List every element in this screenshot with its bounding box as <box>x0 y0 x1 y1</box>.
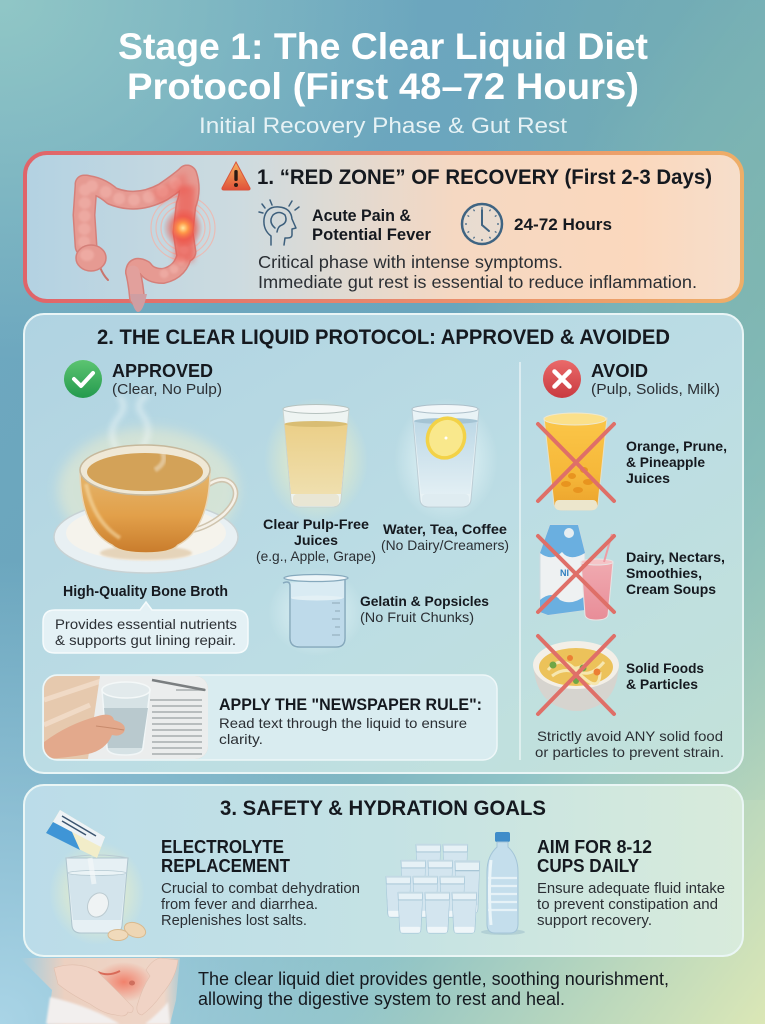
approved heading <box>112 361 222 398</box>
warning icon <box>222 162 250 190</box>
icon: avoid cross <box>543 360 581 398</box>
avoid heading: AVOID <box>591 361 648 381</box>
avoid note: Strictly avoid ANY solid food <box>537 728 723 744</box>
hydration text: to prevent constipation and <box>537 896 718 913</box>
symptom label <box>312 207 432 244</box>
closing message: allowing the digestive system to rest and heal. <box>198 989 565 1009</box>
red zone description <box>258 252 697 292</box>
panel: safety and hydration goals <box>24 785 743 956</box>
avoid note: or particles to prevent strain. <box>535 744 724 760</box>
bone broth label: High-Quality Bone Broth <box>63 584 228 600</box>
electrolyte text: from fever and diarrhea. <box>161 896 318 913</box>
closing message: The clear liquid diet provides gentle, soothing nourishment, <box>198 969 669 989</box>
icon: pulpy juice crossed out <box>538 413 614 510</box>
solid foods label <box>626 660 704 692</box>
approved heading: APPROVED <box>112 361 213 381</box>
colon haustra <box>84 176 186 274</box>
icon: head with pain <box>259 200 299 245</box>
callout: bone broth benefit: & supports gut lining repair. <box>55 632 236 648</box>
juice label <box>256 516 376 564</box>
avoid note <box>535 728 724 760</box>
orange juice label <box>626 438 727 486</box>
hydration text: CUPS DAILY <box>537 855 640 876</box>
orange juice label: & Pineapple <box>626 454 705 470</box>
gelatin label <box>360 593 489 625</box>
icon: soup bowl crossed out <box>533 636 619 714</box>
icon: glass of clear juice <box>264 398 368 522</box>
photo: hands resting on abdomen <box>20 958 180 1024</box>
icon: cup of bone broth <box>54 396 238 573</box>
protocol heading: 2. THE CLEAR LIQUID PROTOCOL: APPROVED & AVOIDED <box>97 326 670 349</box>
red zone description: Critical phase with intense symptoms. <box>258 252 563 272</box>
dairy label: Smoothies, <box>626 565 702 581</box>
electrolyte text <box>161 836 360 929</box>
orange juice label: Juices <box>626 470 670 486</box>
newspaper rule text: clarity. <box>219 731 263 747</box>
icon: milk and smoothie crossed out: NI <box>560 568 569 578</box>
icon: measuring beaker <box>268 568 364 656</box>
callout: bone broth benefit: Provides essential nutrients <box>55 616 237 632</box>
electrolyte text: ELECTROLYTE <box>161 836 284 857</box>
solid foods label: Solid Foods <box>626 660 704 676</box>
safety heading: 3. SAFETY & HYDRATION GOALS <box>220 796 546 820</box>
juice label: Juices <box>294 532 338 548</box>
title: Protocol (First 48–72 Hours) <box>127 66 639 107</box>
symptom label: Potential Fever <box>312 226 432 244</box>
approved heading: (Clear, No Pulp) <box>112 382 222 398</box>
newspaper rule text <box>219 696 482 747</box>
title: Stage 1: The Clear Liquid Diet <box>118 26 648 67</box>
avoid heading <box>591 361 720 398</box>
electrolyte text: Replenishes lost salts. <box>161 912 307 929</box>
icon: approved check <box>64 360 102 398</box>
icon: cups and water bottle <box>386 832 525 935</box>
electrolyte text: REPLACEMENT <box>161 855 291 876</box>
title <box>118 26 648 107</box>
dairy label: Cream Soups <box>626 581 716 597</box>
icon: electrolyte glass and packet <box>46 810 148 945</box>
photo: hand holding glass over newspaper <box>44 676 208 759</box>
electrolyte packet <box>46 810 105 858</box>
panel: red zone of recovery <box>25 153 742 301</box>
panel: newspaper rule <box>43 675 497 760</box>
colon outer wall <box>84 174 189 298</box>
callout: bone broth benefit <box>43 602 248 653</box>
dairy label <box>626 549 725 597</box>
electrolyte text: Crucial to combat dehydration <box>161 880 360 897</box>
dairy label: Dairy, Nectars, <box>626 549 725 565</box>
orange juice label: Orange, Prune, <box>626 438 727 454</box>
newspaper rule text: APPLY THE "NEWSPAPER RULE": <box>219 696 482 714</box>
red zone description: Immediate gut rest is essential to reduce inflammation. <box>258 272 697 292</box>
symptom label: Acute Pain & <box>312 207 411 225</box>
water label: Water, Tea, Coffee <box>383 521 507 537</box>
juice label: Clear Pulp-Free <box>263 516 369 532</box>
newspaper rule text: Read text through the liquid to ensure <box>219 715 467 731</box>
hydration text: Ensure adequate fluid intake <box>537 880 725 897</box>
gelatin label: Gelatin & Popsicles <box>360 593 489 609</box>
hydration text: support recovery. <box>537 912 652 929</box>
juice label: (e.g., Apple, Grape) <box>256 548 376 564</box>
subtitle: Initial Recovery Phase & Gut Rest <box>199 113 567 138</box>
icon: milk and smoothie crossed out <box>538 525 614 620</box>
closing message <box>198 969 669 1009</box>
colon inner tissue <box>84 174 189 298</box>
icon: clock <box>462 204 502 244</box>
gelatin label: (No Fruit Chunks) <box>360 609 474 625</box>
hydration text <box>537 836 725 929</box>
icon: inflamed colon <box>76 172 215 312</box>
red zone heading: 1. “RED ZONE” OF RECOVERY (First 2-3 Days) <box>257 166 712 189</box>
duration label: 24-72 Hours <box>514 216 612 234</box>
icon: glass of water with lemon <box>394 398 498 522</box>
water label: (No Dairy/Creamers) <box>381 537 509 553</box>
water label <box>381 521 509 553</box>
solid foods label: & Particles <box>626 676 698 692</box>
panel: clear liquid protocol <box>24 314 743 773</box>
avoid heading: (Pulp, Solids, Milk) <box>591 382 720 398</box>
hydration text: AIM FOR 8-12 <box>537 836 652 857</box>
water bottle <box>481 832 525 935</box>
